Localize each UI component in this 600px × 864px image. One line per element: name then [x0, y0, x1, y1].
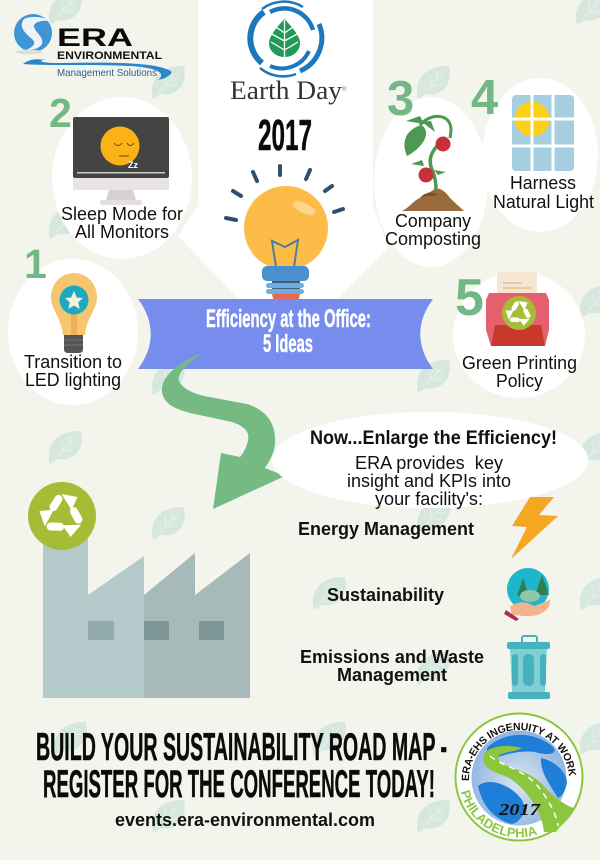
icon: sleeping monitor: Zz: [128, 160, 138, 170]
heading: 2017: 2017: [258, 111, 312, 160]
icon: LED bulb: [51, 273, 97, 353]
text: enlarge the efficiency: Now...Enlarge the Efficiency!: [310, 428, 557, 449]
icon: recycle badge: [28, 482, 96, 550]
label: green printing: [462, 352, 577, 391]
number 5: 5: [455, 269, 484, 327]
banner: [138, 299, 433, 369]
central white panel: [178, 0, 388, 300]
icon: sleeping monitor: [73, 117, 169, 205]
icon: globe in hand: [504, 568, 550, 621]
text: enlarge the efficiency: insight and KPIs into: [347, 470, 511, 491]
label: natural light: Harness: [510, 172, 576, 193]
logo: Earth Day: ®: [342, 86, 347, 93]
text: emissions and waste: Management: [337, 665, 447, 685]
label: composting: Company: [395, 210, 472, 231]
panel: idea ovals: [8, 78, 598, 405]
number 1: 1: [24, 241, 47, 287]
logo: ERA Environmental: ENVIRONMENTAL: [57, 50, 162, 62]
text: enlarge the efficiency: your facility's:: [375, 488, 483, 509]
banner subtitle: 5 Ideas: [263, 330, 313, 358]
label: natural light: Natural Light: [493, 191, 594, 212]
icon: compost plant: [402, 116, 464, 211]
panel: enlarge oval: [272, 412, 588, 508]
text: sustainability: Sustainability: [327, 585, 444, 605]
icon: printer: [486, 272, 549, 346]
label: LED lighting: LED lighting: [25, 369, 121, 390]
logo: ERA Environmental: ERA: [57, 24, 133, 52]
conference badge: PHILADELPHIA: [460, 790, 538, 838]
label: LED lighting: [24, 351, 122, 390]
icon: lightning bolt: [511, 497, 558, 559]
arrow: green curved arrow: [162, 353, 285, 509]
label: composting: Composting: [385, 228, 481, 249]
label: LED lighting: Transition to: [24, 351, 122, 372]
label: sleep mode: [61, 203, 183, 242]
logo: Earth Day: Earth Day: [230, 76, 342, 105]
website url: events.era-environmental.com: [115, 810, 375, 830]
icon: window with sun: [512, 95, 574, 171]
icon: trash can: [507, 636, 550, 699]
logo: Earth Day: [230, 2, 347, 105]
number 2: 2: [49, 90, 72, 136]
label: sleep mode: All Monitors: [75, 221, 169, 242]
conference badge: [454, 712, 584, 842]
conference badge: 2017: [498, 800, 542, 819]
text: emissions and waste: [300, 647, 484, 685]
number 3: 3: [387, 72, 414, 126]
text: energy management: Energy Management: [298, 519, 474, 539]
logo: ERA Environmental: Management Solutions: [57, 67, 157, 79]
label: sleep mode: Sleep Mode for: [61, 203, 183, 224]
logo: ERA Environmental: [14, 14, 172, 80]
text: enlarge the efficiency: ERA provides key: [355, 452, 504, 473]
icon: factory: [28, 482, 250, 698]
call to action heading: [36, 726, 447, 806]
label: natural light: [493, 172, 594, 212]
banner title: Efficiency at the Office:: [206, 305, 371, 333]
label: composting: [385, 210, 481, 249]
text: enlarge the efficiency: [310, 428, 557, 509]
label: green printing: Green Printing: [462, 352, 577, 373]
text: emissions and waste: Emissions and Waste: [300, 647, 484, 667]
icon: central light bulb: [226, 166, 343, 307]
number 4: 4: [471, 71, 498, 125]
conference badge: ERA-EHS INGENUITY AT WORK: [462, 722, 576, 780]
label: green printing: Policy: [496, 370, 544, 391]
